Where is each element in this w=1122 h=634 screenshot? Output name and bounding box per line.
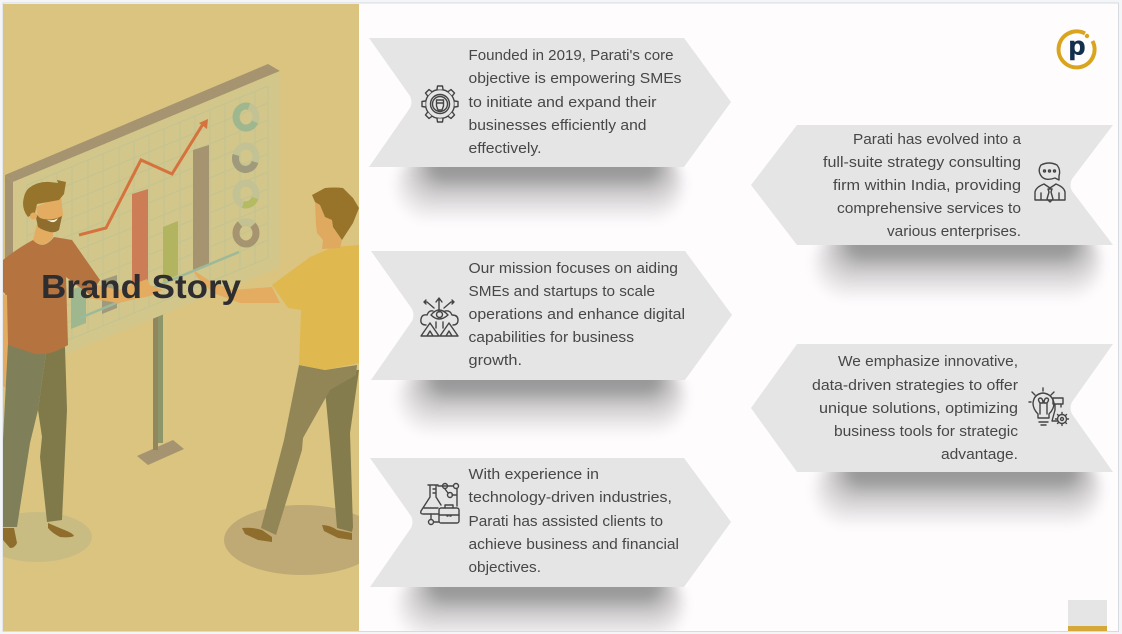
text block — [468, 466, 679, 576]
floor shadows — [0, 505, 380, 575]
text block: Our mission focuses on aiding — [468, 260, 678, 277]
panel: mission — [371, 251, 732, 433]
text block: objectives. — [468, 559, 541, 576]
text block: technology-driven industries, — [468, 489, 672, 506]
text block: capabilities for business — [468, 329, 634, 346]
arrow banner — [370, 458, 731, 587]
drop shadow — [396, 167, 685, 218]
text block — [823, 131, 1022, 240]
text block — [468, 47, 682, 157]
board frame and face — [5, 64, 280, 354]
trend arrow — [79, 119, 208, 235]
panel: innovative strategies — [751, 344, 1113, 525]
text block: full-suite strategy consulting — [823, 154, 1021, 171]
text block: data-driven strategies to offer — [812, 377, 1018, 394]
chart baseline — [80, 252, 239, 318]
text block: to initiate and expand their — [468, 94, 656, 111]
drop shadow — [814, 245, 1103, 296]
icon: light bulb, rook and gear — [1029, 388, 1068, 426]
panel: illustration with title — [0, 4, 380, 631]
panel: experience — [370, 458, 731, 634]
text block: unique solutions, optimizing — [819, 400, 1018, 417]
drop shadow — [814, 472, 1103, 523]
arrow banner — [371, 251, 732, 380]
text block: growth. — [468, 352, 522, 369]
arrow banner — [751, 125, 1113, 245]
arrow banner — [369, 38, 731, 167]
icon: flask and briefcase — [421, 484, 459, 524]
text block: Parati has assisted clients to — [468, 513, 663, 530]
text block: business tools for strategic — [834, 423, 1019, 440]
panel: founded in 2019 — [369, 38, 731, 220]
text block: We emphasize innovative, — [838, 353, 1018, 370]
text block: businesses efficiently and — [468, 117, 646, 134]
illustration: two people at a chart board — [0, 64, 380, 575]
board grid — [27, 86, 268, 357]
text block: various enterprises. — [887, 223, 1021, 240]
text block: With experience in — [468, 466, 599, 483]
logo: p — [1068, 30, 1086, 60]
text block: effectively. — [468, 140, 542, 157]
text block: Parati has evolved into a — [853, 131, 1022, 148]
text block: operations and enhance digital — [468, 306, 685, 323]
text block: comprehensive services to — [837, 200, 1021, 217]
text block — [468, 260, 685, 369]
title: Brand Story — [41, 268, 242, 305]
text block: objective is empowering SMEs — [468, 70, 682, 87]
left person — [3, 180, 163, 548]
drop shadow — [398, 380, 687, 431]
panel: full-suite consulting — [751, 125, 1113, 298]
page number tab — [1068, 600, 1107, 631]
board stand — [137, 310, 184, 465]
donut charts — [235, 106, 256, 244]
text block: advantage. — [941, 446, 1018, 463]
arrow banner — [751, 344, 1113, 472]
logo — [1059, 30, 1095, 67]
text block: SMEs and startups to scale — [468, 283, 655, 300]
right person — [193, 188, 359, 542]
bar chart — [71, 145, 209, 329]
icon: gear with fist — [422, 86, 458, 122]
icon: vision and growth — [421, 298, 458, 336]
icon: consultant with speech bubble — [1035, 163, 1065, 202]
text block — [812, 353, 1019, 463]
drop shadow — [397, 587, 686, 631]
text block: achieve business and financial — [468, 536, 679, 553]
text block: firm within India, providing — [833, 177, 1021, 194]
text block: Founded in 2019, Parati's core — [468, 47, 674, 64]
